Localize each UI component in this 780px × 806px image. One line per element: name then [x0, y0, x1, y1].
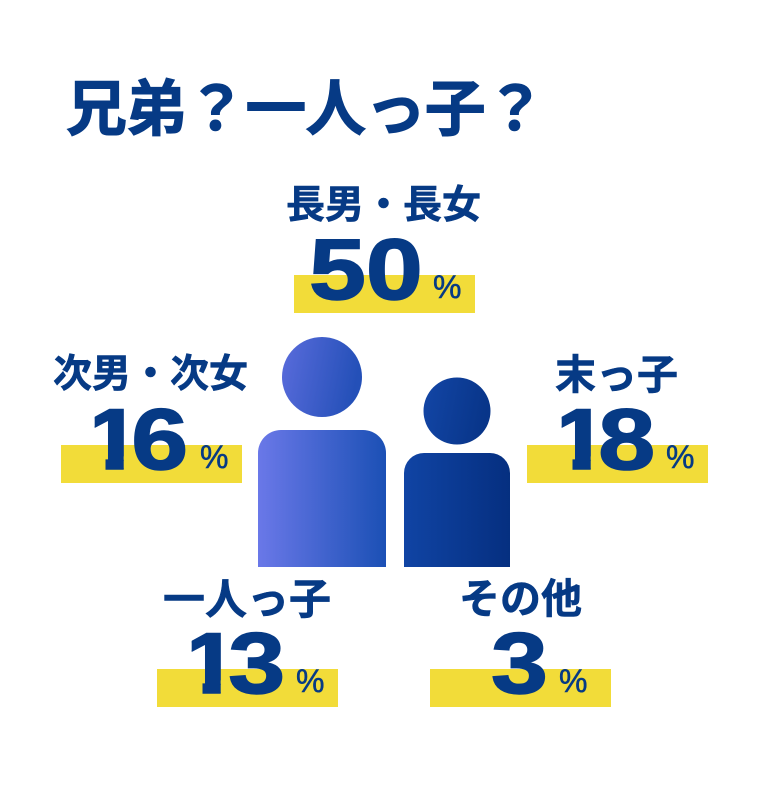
- label: 次男・次女: [53, 353, 248, 396]
- group: only child: [157, 576, 338, 712]
- group: other: [430, 576, 611, 712]
- percent: %: [433, 269, 461, 305]
- value: 6: [131, 392, 188, 488]
- value: 3: [228, 616, 285, 712]
- percent: %: [559, 663, 587, 699]
- value: 1: [182, 616, 239, 712]
- percent: %: [200, 439, 228, 475]
- value: 50: [309, 222, 423, 318]
- percent: %: [666, 439, 694, 475]
- group: youngest: [527, 352, 708, 488]
- title: 兄弟？一人っ子？: [66, 75, 544, 143]
- value: 1: [85, 392, 142, 488]
- highlight bar: [527, 445, 708, 483]
- percent: %: [296, 663, 324, 699]
- group: middle: [53, 353, 248, 488]
- group: eldest: [286, 184, 481, 318]
- highlight bar: [157, 669, 338, 707]
- small person: [404, 378, 510, 567]
- label: 一人っ子: [163, 576, 331, 623]
- label: 長男・長女: [286, 184, 481, 227]
- label: その他: [459, 576, 582, 622]
- value: [562, 392, 655, 488]
- highlight bar: [61, 445, 242, 483]
- large person: [258, 337, 386, 567]
- value: 8: [598, 392, 655, 488]
- value: [94, 392, 188, 488]
- highlight bar: [294, 275, 475, 313]
- value: [192, 616, 285, 712]
- highlight bar: [430, 669, 611, 707]
- label: 末っ子: [555, 352, 678, 398]
- value: 3: [491, 616, 548, 712]
- value: 1: [552, 392, 609, 488]
- icon: two people: [258, 337, 510, 567]
